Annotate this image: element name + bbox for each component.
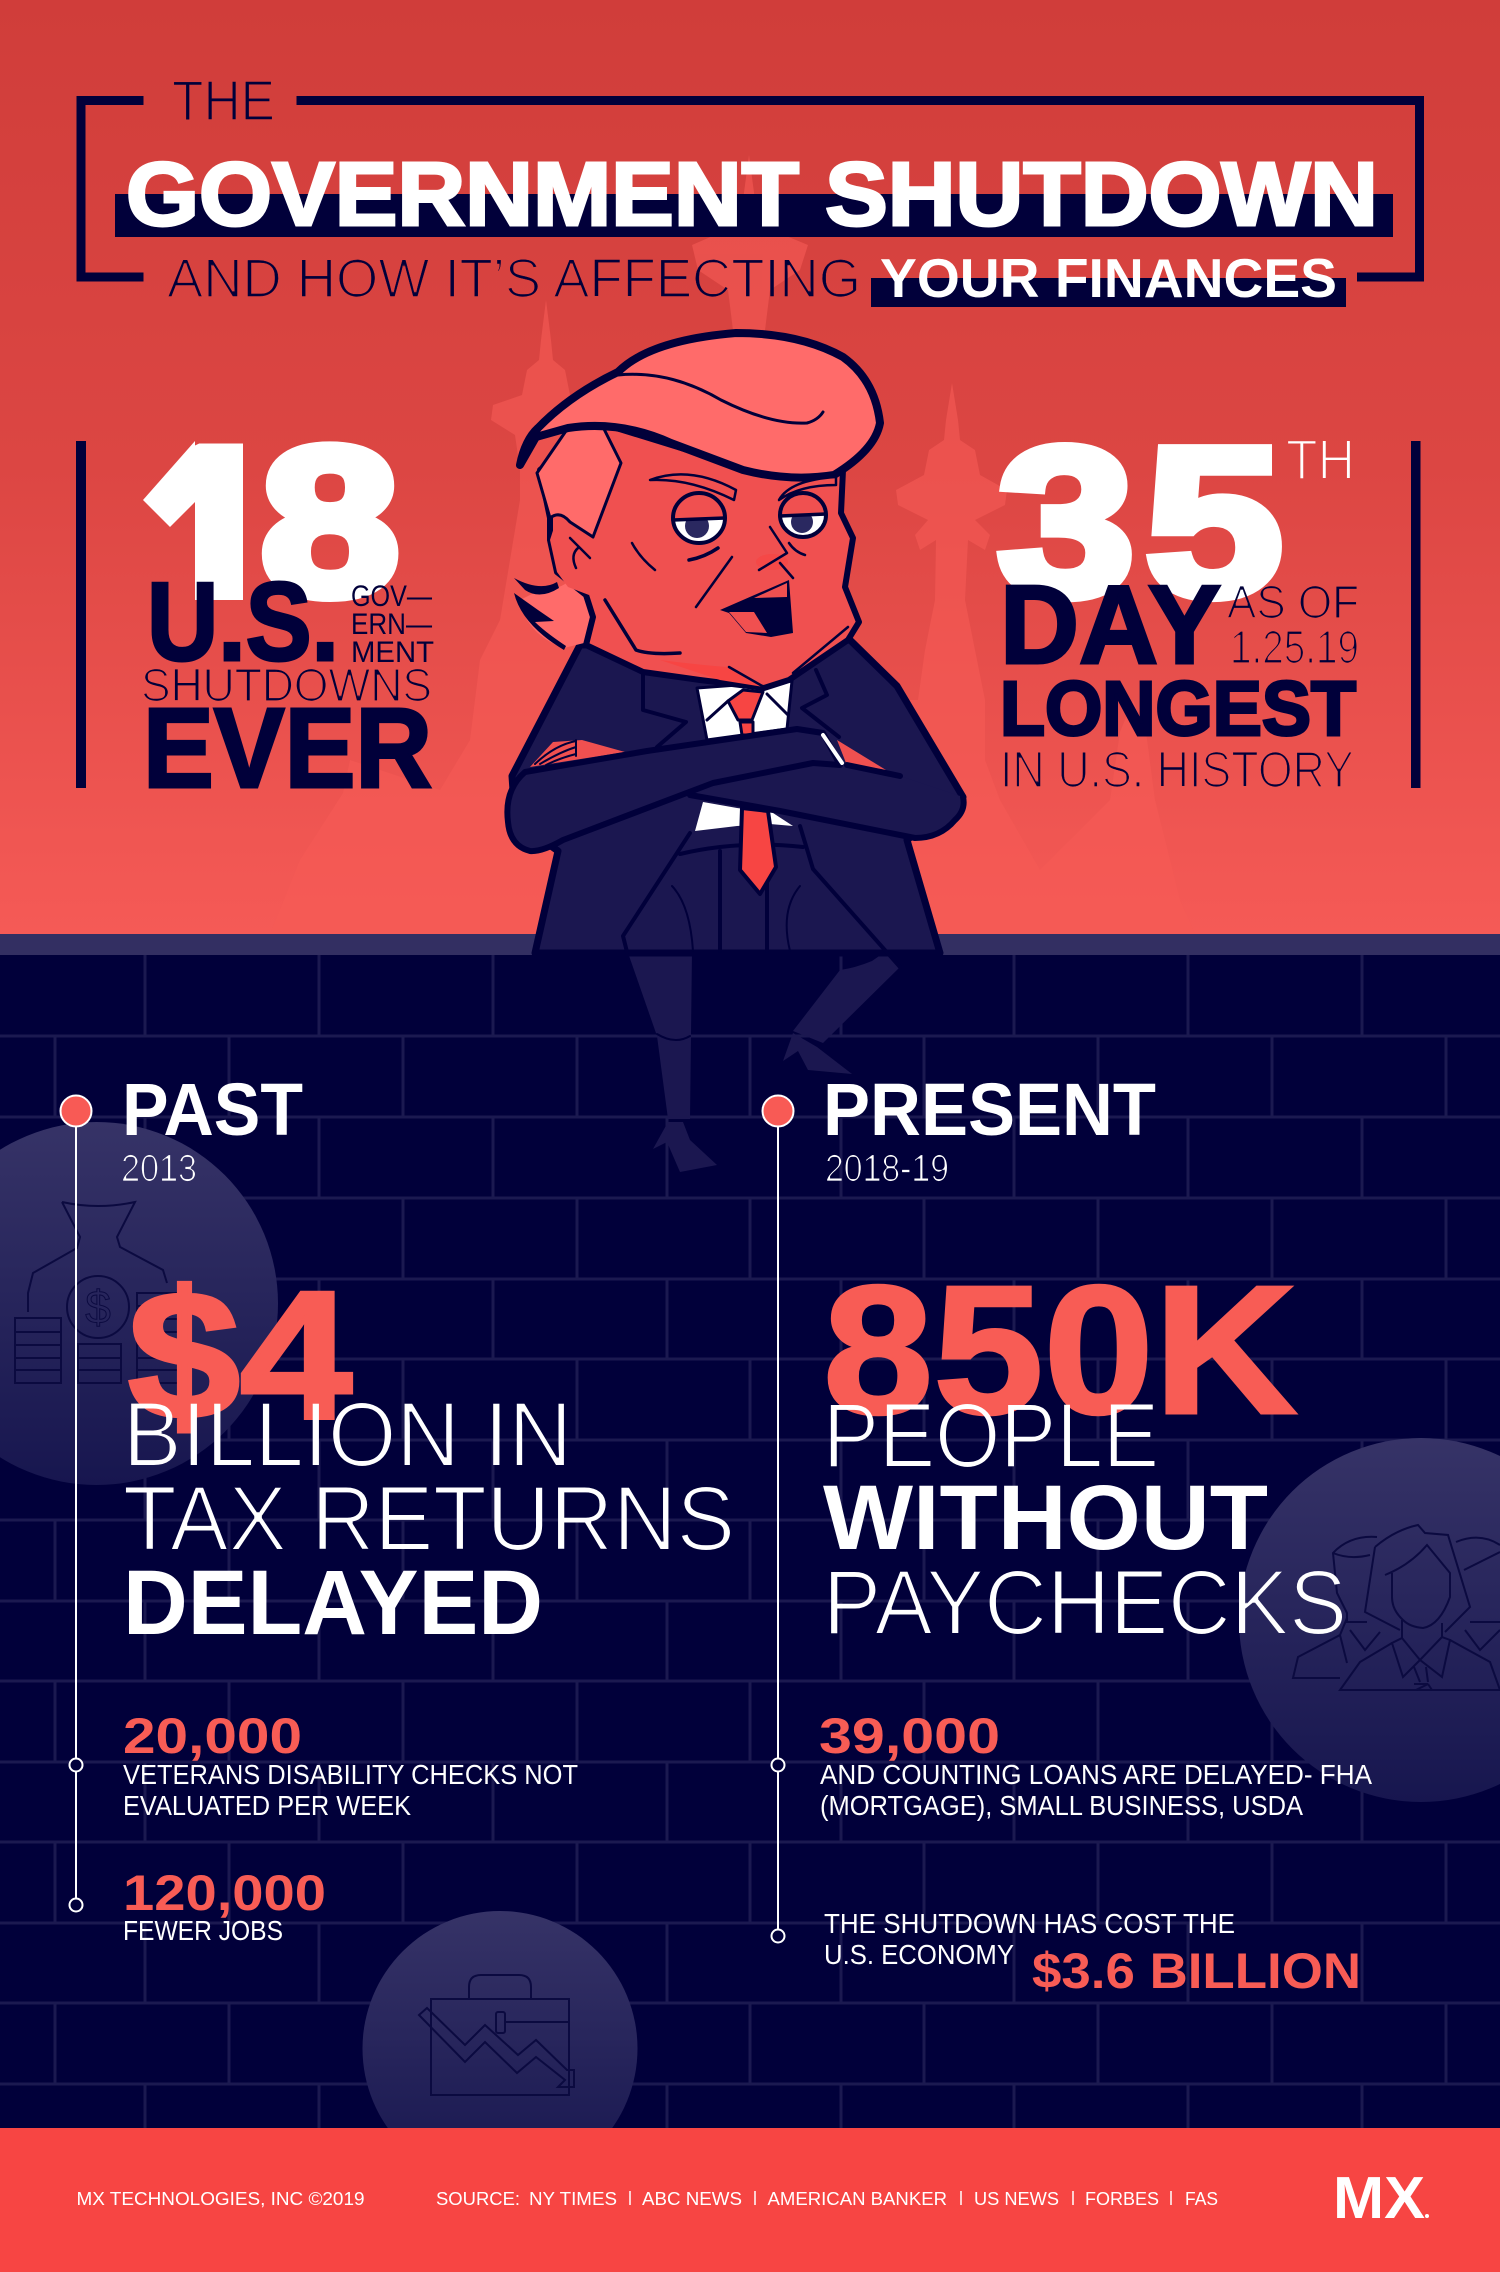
stat: economy cost: $3.6 BILLION xyxy=(1032,1943,1361,1999)
character hair spike lower xyxy=(514,593,566,650)
stat: 39,000: AND COUNTING LOANS ARE DELAYED- FHA xyxy=(820,1759,1372,1790)
character upper lip xyxy=(754,583,787,598)
character cuff xyxy=(823,735,842,763)
number 18 xyxy=(143,441,398,602)
character collar xyxy=(707,694,788,720)
text: billion in: BILLION IN xyxy=(123,1384,572,1486)
as of date: AS OF xyxy=(1227,576,1359,628)
subtitle: your finances: YOUR FINANCES xyxy=(880,247,1337,309)
wall cap xyxy=(0,934,1500,955)
character hair spike upper xyxy=(514,578,559,595)
character right eye xyxy=(780,493,826,537)
footer copyright: MX TECHNOLOGIES, INC ©2019 xyxy=(76,2189,364,2209)
day: DAY xyxy=(1000,563,1221,687)
character pants lines xyxy=(623,826,900,1040)
text: delayed: DELAYED xyxy=(123,1552,543,1654)
stat: 39,000: (MORTGAGE), SMALL BUSINESS, USDA xyxy=(820,1790,1303,1821)
footer sources: NY TIMES xyxy=(529,2189,617,2209)
character shirt xyxy=(697,681,792,740)
title block xyxy=(81,69,1420,309)
character arm right outline xyxy=(690,765,964,838)
character sleeve left xyxy=(530,740,625,767)
character nose blush xyxy=(756,554,788,570)
character lapels xyxy=(643,670,839,747)
heading: past: PAST xyxy=(122,1068,303,1151)
government stacked: MENT xyxy=(351,636,434,669)
character tie xyxy=(740,808,776,894)
character ear xyxy=(550,518,593,595)
subtitle: AND HOW IT’S AFFECTING xyxy=(167,247,861,309)
character left eye xyxy=(673,493,725,543)
stat: 20,000: 20,000 xyxy=(123,1708,302,1764)
icon: money bag outline: $ xyxy=(85,1281,111,1333)
character face xyxy=(540,423,859,688)
footer band xyxy=(0,2128,1500,2272)
stat: 120,000: 120,000 xyxy=(123,1865,326,1921)
stat: economy cost: THE SHUTDOWN HAS COST THE xyxy=(824,1908,1235,1939)
big number: $4: $4 xyxy=(128,1253,352,1457)
footer sources: FORBES xyxy=(1085,2189,1159,2209)
footer sources xyxy=(436,2189,1218,2209)
footer xyxy=(0,2128,1500,2272)
as of date xyxy=(1227,576,1359,673)
icon: briefcase with falling arrow xyxy=(419,1975,574,2095)
character hair xyxy=(520,333,880,478)
stat: 20,000: VETERANS DISABILITY CHECKS NOT xyxy=(123,1759,578,1790)
longest: LONGEST xyxy=(1000,666,1356,752)
icon disc: people xyxy=(1239,1438,1500,1802)
footer sources: US NEWS xyxy=(974,2189,1059,2209)
footer sources: AMERICAN BANKER xyxy=(768,2189,947,2209)
title: the: THE xyxy=(172,69,275,133)
hero background xyxy=(0,0,1500,934)
shutdowns: SHUTDOWNS xyxy=(141,659,432,711)
character right brow xyxy=(779,477,836,500)
character legs xyxy=(627,950,900,1172)
heading: present: PRESENT xyxy=(823,1068,1156,1151)
character tie knot xyxy=(728,690,763,720)
text: without: WITHOUT xyxy=(823,1467,1268,1569)
panel: present xyxy=(762,1068,1500,1999)
character jacket xyxy=(512,640,963,953)
number 35: 3 xyxy=(997,403,1135,640)
number 18: 1 xyxy=(132,404,294,639)
character sleeve creases xyxy=(535,740,576,765)
stat: 39,000: 39,000 xyxy=(819,1708,1000,1764)
stat: 20,000: EVALUATED PER WEEK xyxy=(123,1790,411,1821)
stat: 20,000 xyxy=(123,1708,578,1821)
left rule xyxy=(76,441,86,788)
logo: mx: MX xyxy=(1333,2165,1425,2231)
icon: money bag outline xyxy=(15,1202,181,1383)
footer sources: ABC NEWS xyxy=(642,2189,742,2209)
in u.s. history: IN U.S. HISTORY xyxy=(1000,741,1354,798)
character: cartoon politician sitting on wall xyxy=(507,333,964,1172)
government stacked: ERN— xyxy=(351,608,432,641)
character arm left xyxy=(507,729,840,851)
character lower shirt xyxy=(695,802,793,831)
title frame xyxy=(81,100,1420,277)
character arm right xyxy=(690,763,963,838)
government stacked xyxy=(351,580,434,669)
number 35: 5 xyxy=(1145,403,1283,640)
character neck blush xyxy=(660,660,764,687)
character face lines xyxy=(605,527,848,687)
panel: past xyxy=(0,1068,735,1946)
stat: economy cost: U.S. ECONOMY xyxy=(824,1939,1014,1970)
stat: 35th day xyxy=(997,403,1420,798)
ever: EVER xyxy=(143,685,432,811)
th: TH xyxy=(1286,428,1355,492)
stat: economy cost xyxy=(824,1908,1361,1999)
year: 2013: 2013 xyxy=(121,1148,197,1190)
icon: group of people xyxy=(1293,1525,1500,1690)
number 35 xyxy=(997,403,1283,640)
timeline: past xyxy=(60,1096,92,1912)
timeline: present xyxy=(762,1096,794,1942)
icon disc: money bag xyxy=(0,1122,278,1485)
character sleeve right xyxy=(837,740,886,770)
character tongue xyxy=(729,612,767,633)
text: paychecks: PAYCHECKS xyxy=(823,1552,1347,1654)
character mouth xyxy=(720,580,793,637)
text: tax returns: TAX RETURNS xyxy=(123,1468,735,1570)
government stacked: GOV— xyxy=(351,580,432,613)
footer sources: SOURCE: xyxy=(436,2189,520,2209)
character left brow xyxy=(650,474,736,500)
character side hair xyxy=(537,427,621,537)
capitol silhouettes xyxy=(270,155,1195,934)
title highlight bar xyxy=(115,194,1393,237)
stat: 120,000: FEWER JOBS xyxy=(123,1915,283,1946)
number 18: 8 xyxy=(261,404,399,639)
character hair strand xyxy=(618,374,823,423)
title: government shutdown: GOVERNMENT SHUTDOWN xyxy=(126,145,1378,245)
icon disc: falling briefcase xyxy=(362,1911,638,2128)
stat: 39,000 xyxy=(819,1708,1372,1821)
stat: 120,000 xyxy=(123,1865,326,1946)
character tie middle xyxy=(740,722,753,735)
as of date: 1.25.19 xyxy=(1230,621,1359,673)
footer sources: FAS xyxy=(1185,2189,1218,2209)
brick wall xyxy=(0,955,1500,2128)
character back hair tuft xyxy=(520,580,593,648)
stat: 18 shutdowns xyxy=(76,441,434,788)
character ear lines xyxy=(570,538,590,568)
text: people: PEOPLE xyxy=(823,1385,1159,1487)
year: 2018-19: 2018-19 xyxy=(825,1148,949,1190)
subtitle highlight bar xyxy=(871,278,1346,307)
big number: 850k: 850K xyxy=(823,1247,1297,1452)
right rule xyxy=(1411,441,1420,788)
u.s.: U.S. xyxy=(147,560,339,684)
